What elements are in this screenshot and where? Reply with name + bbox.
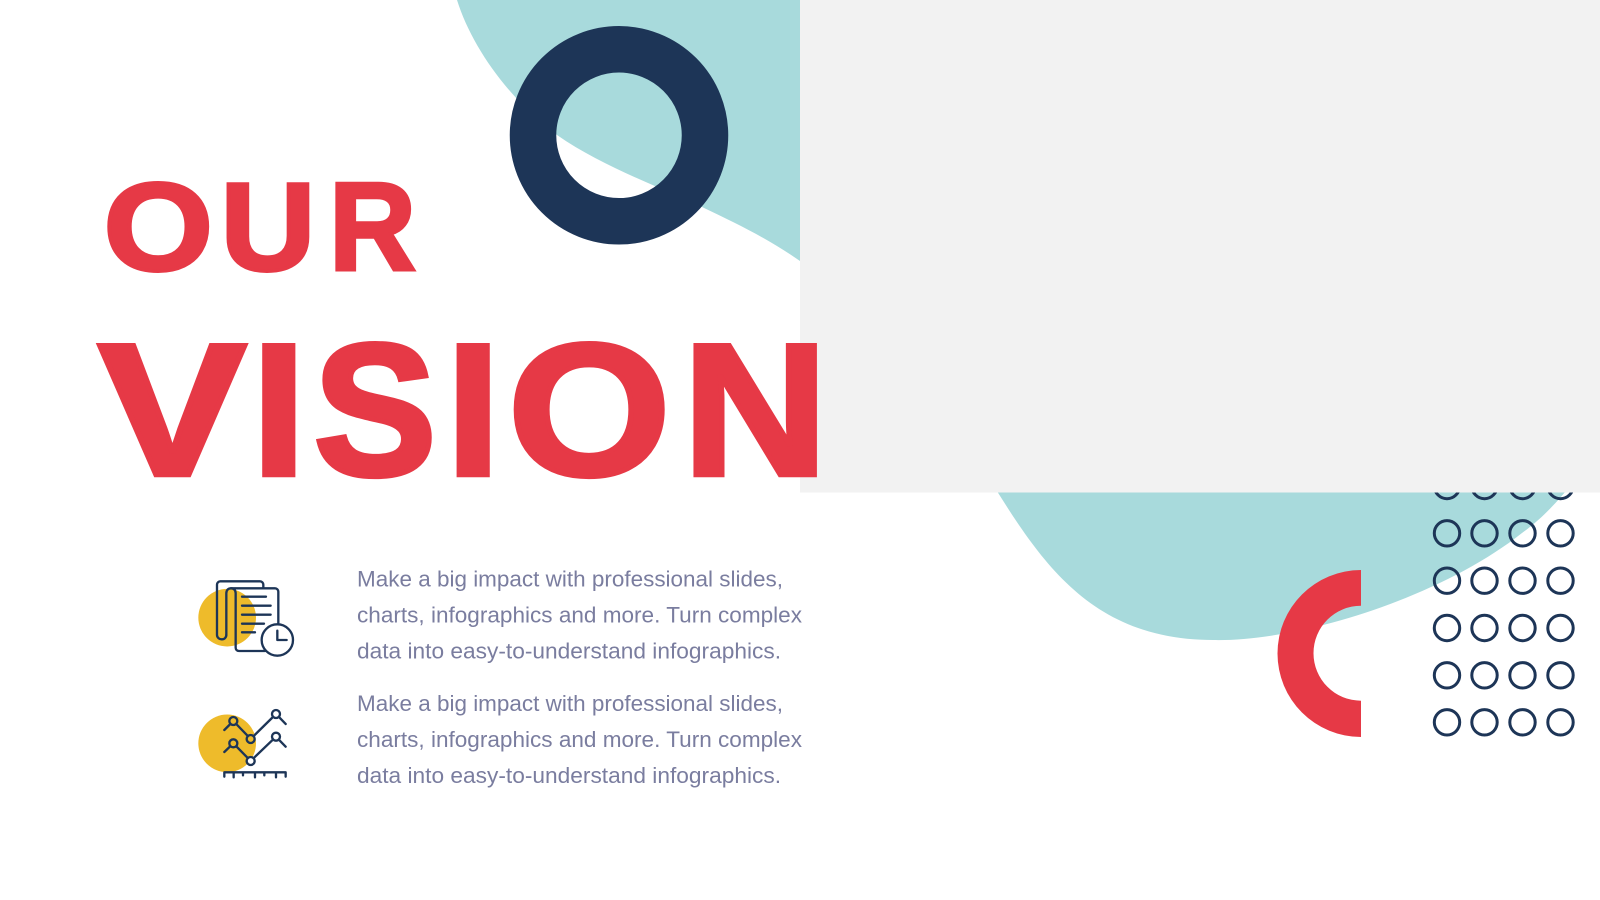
icon: line charts: [198, 710, 286, 777]
title: VISION: I: [252, 305, 306, 515]
navy ring: [533, 49, 705, 221]
teal blob: top: [457, 0, 800, 261]
text block: first paragraph: charts, infographics and more. Turn complex: [357, 602, 802, 627]
title: VISION: V: [98, 305, 246, 515]
title: OUR: R: [329, 158, 416, 297]
text block: second paragraph: data into easy-to-understand infographics.: [357, 763, 781, 788]
teal blob: bottom right: [990, 480, 1575, 640]
text block: first paragraph: [357, 567, 802, 663]
title: VISION: O: [508, 305, 671, 515]
dot grid: [1434, 473, 1573, 735]
title: VISION: I: [446, 305, 500, 515]
icon: documents with clock: [198, 581, 293, 656]
image placeholder panel: [800, 0, 1600, 492]
text block: second paragraph: charts, infographics and more. Turn complex: [357, 727, 802, 752]
red half ring: [1278, 570, 1361, 737]
title: OUR: U: [220, 158, 316, 297]
text block: first paragraph: Make a big impact with professional slides,: [357, 567, 783, 592]
title: VISION: N: [683, 305, 828, 515]
title: OUR: O: [104, 158, 213, 297]
text block: first paragraph: data into easy-to-understand infographics.: [357, 638, 781, 663]
title: VISION: S: [314, 305, 436, 515]
text block: second paragraph: [357, 691, 802, 788]
text block: second paragraph: Make a big impact with professional slides,: [357, 691, 783, 716]
